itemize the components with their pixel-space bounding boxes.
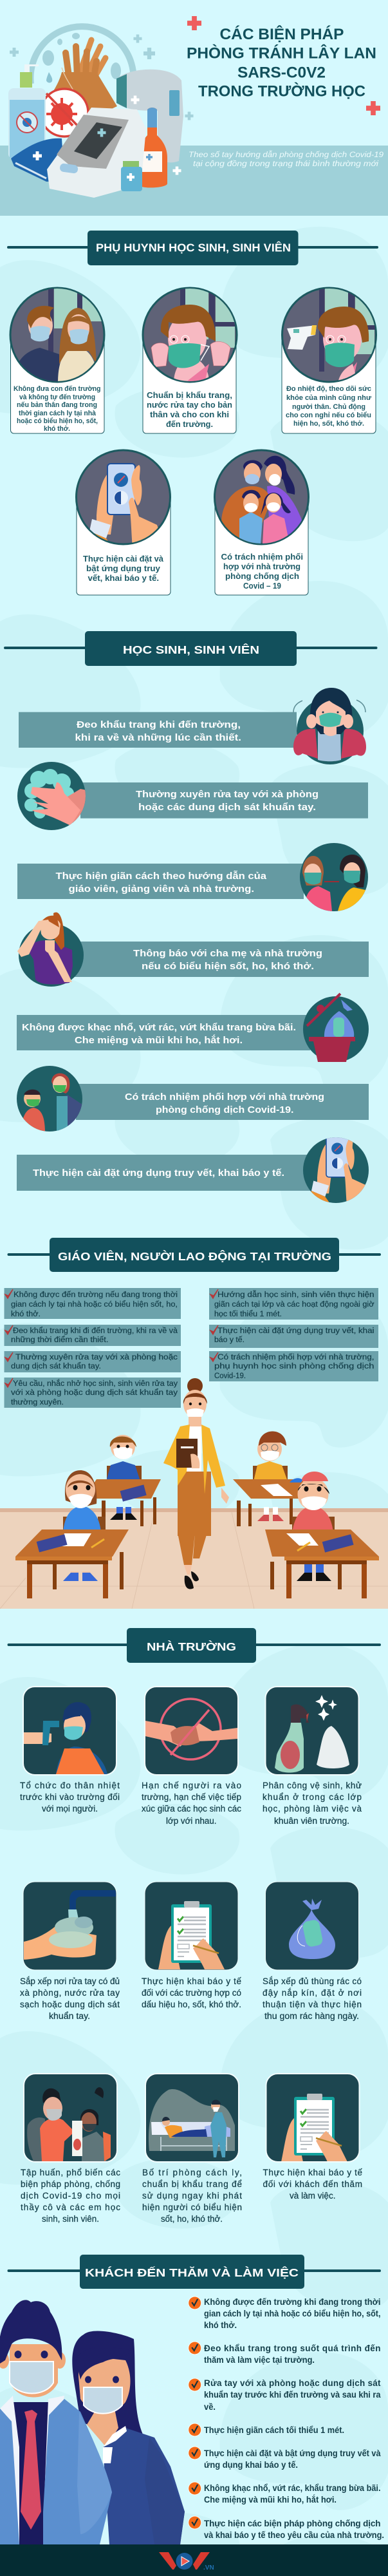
panel: school item visitor declaration <box>263 2074 362 2201</box>
woman visitor <box>72 2331 185 2544</box>
text block: chuẩn bị khẩu trang để <box>142 2179 242 2189</box>
text block <box>263 1976 362 2021</box>
text block: trường, hạn chế việc tiếp <box>142 1792 241 1802</box>
icon: sealed trash bag <box>265 1882 359 1970</box>
section heading: parents: PHỤ HUYNH HỌC SINH, SINH VIÊN <box>96 241 291 254</box>
panel: school item isolation room <box>142 2074 242 2224</box>
checklist item: gian cách ly tại nhà hoặc có biểu hiện ho, sốt, <box>204 2309 381 2318</box>
icon: no handshake <box>145 1687 238 1775</box>
front right student and desk <box>265 1472 379 1598</box>
panel: school item bins <box>263 1882 362 2021</box>
title: TRONG TRƯỜNG HỌC <box>198 82 365 100</box>
list item: báo y tế. <box>214 1336 245 1344</box>
icon: washing hands <box>42 40 117 116</box>
list item <box>4 1325 181 1346</box>
icon: isolation room with patient <box>145 2074 239 2162</box>
text block: nước rửa tay cho bản <box>147 400 232 410</box>
illustration: phone with apps <box>76 450 170 547</box>
text block: và làm việc. <box>290 2191 336 2201</box>
floor <box>0 1508 388 1609</box>
illustration: family wearing masks <box>215 450 309 544</box>
text block: nếu bản thân đang trong <box>17 401 97 409</box>
panel: teacher left list <box>4 1288 181 1408</box>
text block: bật ứng dụng truy <box>86 564 161 573</box>
list item: Yêu cầu, nhắc nhở học sinh, sinh viên rửa tay <box>13 1379 178 1388</box>
text block: hiện người có biểu hiện <box>142 2202 242 2212</box>
back left desk and student <box>84 1435 161 1526</box>
section heading: students <box>4 631 377 666</box>
text block: Phân công vệ sinh, khử <box>263 1781 362 1790</box>
panel: student item hygiene: Che miệng và mũi khi ho, hắt hơi. <box>75 1034 243 1046</box>
list item: Không được đến trường nếu đang trong thời <box>14 1291 178 1299</box>
checklist item: khuẩn tay trước khi đến trường và sau khi ra <box>204 2390 381 2400</box>
text block <box>20 1976 120 2021</box>
text block <box>142 1781 241 1826</box>
text block: dấu hiệu ho, sốt, khó thở. <box>142 2000 241 2009</box>
hero illustration: hygiene and medical items <box>8 26 193 198</box>
text block <box>142 2168 242 2224</box>
checklist item: thăm và làm việc tại trường. <box>204 2355 315 2365</box>
icon: orange medicine bottle <box>137 108 167 187</box>
title: SARS-C0V2 <box>237 64 326 82</box>
icon: girl adjusting a mask <box>293 688 366 764</box>
list item: Đeo khẩu trang khi đi đến trường, khi ra về và <box>13 1327 178 1335</box>
text block: sinh, sinh viên. <box>42 2214 99 2224</box>
text block: phòng chống dịch <box>225 571 299 581</box>
icon: medical declaration clipboard <box>145 1882 238 1970</box>
list item <box>4 1351 181 1372</box>
panel: student item handwashing: hoặc các dung dịch sát khuẩn tay. <box>138 802 316 813</box>
list item: thường xuyên. <box>11 1399 64 1406</box>
list item: Thực hiện cài đặt ứng dụng truy vết, khai <box>217 1327 374 1335</box>
text block: Bố trí phòng cách ly, <box>142 2168 242 2177</box>
section heading: teachers: GIÁO VIÊN, NGƯỜI LAO ĐỘNG TẠI TRƯỜNG <box>58 1249 331 1263</box>
section heading: school: NHÀ TRƯỜNG <box>147 1640 236 1653</box>
panel: school item cleaning <box>263 1687 362 1826</box>
list item <box>209 1325 378 1348</box>
text block <box>83 554 164 583</box>
icon: small blue jar <box>121 161 142 191</box>
text block: Covid – 19 <box>243 581 281 591</box>
text block: hoặc có biểu hiện ho, sốt, <box>17 417 98 425</box>
checklist item: ứng dụng khai báo y tế. <box>204 2460 298 2470</box>
subtitle: tại cộng đồng trong trạng thái bình thường mới <box>193 159 378 168</box>
panel: student item handwashing <box>17 762 368 830</box>
list item <box>209 1288 378 1320</box>
list item: phụ huynh học sinh phòng chống dịch <box>214 1363 374 1370</box>
panel: student item cooperate <box>17 1066 369 1133</box>
checklist item: Không được đến trường khi đang trong thời <box>204 2297 381 2307</box>
panel: student item tracing app: Thực hiện cài đặt ứng dụng truy vết, khai báo y tế. <box>33 1168 284 1179</box>
checklist item <box>188 2482 381 2505</box>
text block: khó thở. <box>44 425 70 433</box>
list item <box>209 1351 378 1381</box>
checklist item <box>188 2342 381 2365</box>
text block: sử dụng ngay khi phát <box>142 2191 242 2201</box>
text block: đến trường. <box>166 419 213 429</box>
text block <box>14 385 100 433</box>
icon: visitor declaration clipboard <box>266 2074 359 2162</box>
text block: Chuẩn bị khẩu trang, <box>147 390 232 400</box>
illustration: worried couple <box>10 288 104 384</box>
checklist item: Thực hiện giãn cách tối thiểu 1 mét. <box>204 2425 344 2435</box>
panel: school item health declaration <box>142 1882 241 2009</box>
panel: parents card 3 <box>282 288 377 433</box>
text block: biện pháp phòng, chống <box>21 2179 120 2189</box>
text block <box>142 1976 241 2009</box>
list item: giãn cách tại lớp và các hoạt động ngoài giờ <box>214 1301 374 1309</box>
text block: sạch hoặc dung dịch sát <box>20 2000 120 2009</box>
checklist item <box>188 2297 381 2330</box>
checklist item <box>188 2515 384 2540</box>
icon: red cross marks <box>187 16 380 115</box>
checklist item: và khai báo y tế theo yêu cầu của nhà trường. <box>204 2530 384 2540</box>
panel: student item distancing: Thực hiện giãn cách theo hướng dẫn của <box>55 871 267 882</box>
text block: Không đưa con đến trường <box>14 385 100 393</box>
text block <box>263 2168 362 2201</box>
checklist item: Thực hiện các biện pháp phòng chống dịch <box>204 2519 381 2528</box>
panel: student item mask <box>19 688 366 764</box>
text block: thân và cho con khi <box>150 410 229 419</box>
text block: vết, khai báo y tế. <box>88 573 159 583</box>
icon: phone in hand <box>303 1135 369 1204</box>
text block: đối với khách đến thăm <box>263 2179 362 2189</box>
text block: thu gom rác hàng ngày. <box>264 2011 359 2021</box>
text block: xà phòng, nước rửa tay <box>20 1988 120 1998</box>
checklist item: Đeo khẩu trang trong suốt quá trình đến <box>204 2344 381 2353</box>
back right desk and student <box>233 1431 310 1526</box>
hero panel <box>0 0 388 216</box>
text block: trước khi vào trường đối <box>20 1792 120 1802</box>
icon: hand sanitizer bottle <box>8 64 46 159</box>
icon: spray bottle and cloth <box>265 1687 359 1775</box>
panel: teacher right list <box>209 1288 378 1381</box>
panel: parents card 2 <box>143 288 237 433</box>
checklist item: khó thở. <box>204 2320 237 2330</box>
subtitle <box>189 150 383 168</box>
panel: school item temperature <box>20 1687 120 1814</box>
checklist item: Thực hiện cài đặt và bật ứng dụng truy vết và <box>204 2448 381 2458</box>
checklist item: Che miệng và mũi khi ho, hắt hơi. <box>204 2495 337 2505</box>
illustration: visitors wearing masks <box>0 2300 185 2544</box>
panel: school item restrict <box>142 1687 241 1826</box>
panel: student item mask: khi ra về và những lúc cần thiết. <box>75 732 241 743</box>
icon: trash bin with used mask <box>303 994 369 1062</box>
list item: Có trách nhiệm phối hợp với nhà trường, <box>217 1354 374 1361</box>
checklist item: về. <box>204 2402 216 2412</box>
panel: student item cooperate: Có trách nhiệm phối hợp với nhà trường <box>125 1092 324 1103</box>
text block: Thực hiện khai báo y tế <box>142 1976 241 1986</box>
text block: học, phòng làm việc và <box>263 1804 362 1814</box>
panel: student item hygiene <box>17 994 369 1062</box>
logo: VOV: .VN <box>203 2564 214 2571</box>
text block: Tập huấn, phổ biến các <box>21 2168 120 2177</box>
icon: blood pressure monitor <box>47 108 146 198</box>
section heading: parents <box>7 231 378 265</box>
panel: parents card 1 <box>10 288 104 433</box>
list item: với xà phòng hoặc dung dịch sát khuẩn tay <box>11 1389 178 1397</box>
list item: dung dịch sát khuẩn tay. <box>11 1363 101 1370</box>
panel: school item wash stations <box>20 1882 120 2021</box>
text block: Có trách nhiệm phối <box>221 552 303 562</box>
icon: blue towel <box>11 138 64 182</box>
text block: đối với các trường hợp có <box>142 1988 241 1998</box>
panel: student item notify <box>17 913 369 987</box>
text block <box>21 2168 120 2224</box>
panel: school item training <box>21 2074 120 2224</box>
list item: Covid-19. <box>214 1372 246 1380</box>
text block: khuẩn ở trong các lớp <box>263 1792 362 1802</box>
text block: khỏe của mình cũng như <box>286 394 371 402</box>
text block: dịch Covid-19 cho mọi <box>21 2191 120 2201</box>
classroom scene <box>0 1378 388 1609</box>
man visitor <box>0 2300 112 2544</box>
text block: Sắp xếp đủ thùng rác có <box>263 1976 362 1986</box>
icon: two students with a poster <box>24 2074 117 2162</box>
checklist item: Rửa tay với xà phòng hoặc dung dịch sát <box>204 2378 381 2388</box>
text block <box>263 1781 362 1826</box>
illustration: preparing a mask <box>143 288 237 383</box>
illustration: temperature check <box>282 288 377 383</box>
text block: Thực hiện khai báo y tế <box>263 2168 362 2177</box>
panel: student item distancing: giáo viên, giảng viên và nhà trường. <box>68 884 254 895</box>
panel: student item notify: nếu có biểu hiện sốt, ho, khó thở. <box>142 961 314 972</box>
text block: khuân viên trường. <box>274 1816 349 1826</box>
icon: temperature check <box>23 1687 116 1775</box>
text block: Đo nhiệt độ, theo dõi sức <box>286 385 371 393</box>
text block <box>147 390 232 429</box>
text block: thời gian cách ly tại nhà <box>19 410 97 417</box>
text block: Hạn chế người ra vào <box>142 1781 241 1790</box>
icon: two people at a distance <box>300 843 368 911</box>
title <box>187 25 376 100</box>
list item <box>4 1378 181 1408</box>
section heading: students: HỌC SINH, SINH VIÊN <box>123 643 259 656</box>
text block <box>286 385 371 428</box>
section heading: visitors: KHÁCH ĐẾN THĂM VÀ LÀM VIỆC <box>85 2266 299 2279</box>
text block: hiện ho, sốt, khó thở. <box>293 420 364 428</box>
list item: gian cách ly tại nhà hoặc có biểu hiện sốt, ho, <box>11 1301 178 1309</box>
icon: crossed-out virus <box>41 89 88 137</box>
panel: visitor checklist <box>188 2297 384 2540</box>
text block: Thực hiện cài đặt và <box>83 554 164 564</box>
title: PHÒNG TRÁNH LÂY LAN <box>187 44 376 62</box>
section heading: school <box>8 1628 381 1663</box>
text block: Tổ chức đo thân nhiệt <box>20 1781 120 1790</box>
checklist item <box>188 2446 381 2470</box>
text block: thuận tiện và thực hiện <box>263 2000 362 2009</box>
checklist item: Không khạc nhổ, vứt rác, khẩu trang bừa bãi. <box>204 2483 381 2493</box>
list item <box>4 1288 181 1319</box>
panel: student item distancing <box>17 843 368 911</box>
text block: cho con nghỉ nếu có biểu <box>286 412 371 419</box>
checklist item <box>188 2378 381 2412</box>
icon: coughing woman <box>17 913 84 987</box>
text block <box>221 552 303 591</box>
panel: student item notify: Thông báo với cha mẹ và nhà trường <box>133 948 322 959</box>
text block: với mọi người. <box>42 1804 98 1814</box>
text block: hợp với nhà trường <box>223 562 300 571</box>
list item: khó thở. <box>11 1311 41 1318</box>
text block: đậy nắp kín, đặt ở nơi <box>263 1988 362 1998</box>
icon: hands under a faucet <box>23 1882 116 1970</box>
section heading: visitors <box>8 2255 381 2289</box>
panel: parents card 5 <box>215 450 309 595</box>
logo: VOV <box>159 2552 214 2571</box>
list item: Thường xuyên rửa tay với xà phòng hoặc <box>15 1354 178 1361</box>
panel: parents card 4 <box>76 450 171 595</box>
teacher <box>163 1378 229 1589</box>
text block <box>20 1781 120 1814</box>
text block: người thân. Chủ động <box>292 403 365 411</box>
icon: soapy hands <box>17 762 90 830</box>
title: CÁC BIỆN PHÁP <box>220 25 344 43</box>
panel: student item cooperate: phòng chống dịch Covid-19. <box>156 1104 293 1115</box>
icon: infrared thermometer <box>116 70 183 162</box>
panel: student item tracing app <box>17 1135 369 1204</box>
text block: khuẩn tay. <box>49 2011 90 2021</box>
text block: Sắp xếp nơi rửa tay có đủ <box>20 1976 120 1986</box>
text block: xúc giữa các học sinh các <box>142 1804 241 1814</box>
panel: student item hygiene: Không được khạc nhổ, vứt rác, vứt khẩu trang bừa bãi. <box>22 1022 296 1033</box>
list item: Hướng dẫn học sinh, sinh viên thực hiện <box>217 1291 374 1299</box>
text block: lớp với nhau. <box>166 1816 216 1826</box>
text block: sốt, ho, khó thở. <box>161 2214 223 2224</box>
subtitle: Theo số tay hướng dẫn phòng chống dịch Covid-19 <box>189 150 383 159</box>
list item: học tối thiểu 1 mét. <box>214 1311 282 1318</box>
front left student and desk <box>15 1470 129 1598</box>
panel: student item mask: Đeo khẩu trang khi đến trường, <box>77 719 241 730</box>
list item: những thời điểm cần thiết. <box>11 1336 108 1344</box>
text block: và không tự đến trường <box>19 393 95 401</box>
checklist item <box>188 2423 344 2437</box>
section heading: teachers <box>8 1238 381 1272</box>
panel: student item handwashing: Thường xuyên rửa tay với xà phòng <box>136 789 319 800</box>
text block: thầy cô và các em học <box>21 2202 120 2212</box>
icon: teacher checking a child <box>17 1066 82 1133</box>
footer <box>0 2544 388 2576</box>
